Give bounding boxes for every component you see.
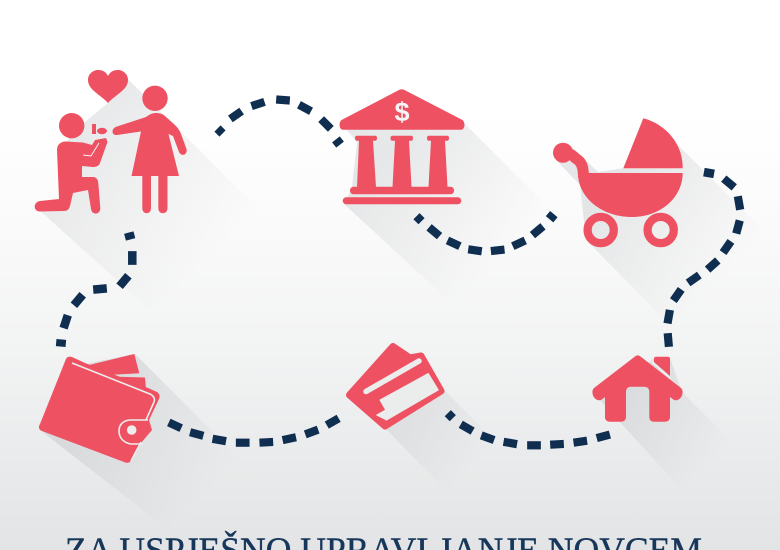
icon: wallet xyxy=(39,354,160,463)
icon: bank xyxy=(340,89,464,204)
roof gap xyxy=(651,361,671,379)
banknotes xyxy=(85,354,146,389)
figure: kneeling man xyxy=(35,113,108,214)
card window xyxy=(377,374,438,420)
chimney xyxy=(654,357,670,376)
dollar sign: $ xyxy=(394,97,410,127)
dashed path: cards to wallet xyxy=(168,415,340,446)
icon: proposal couple with heart xyxy=(35,70,187,214)
figure: woman xyxy=(112,86,187,213)
dashed path: bank to stroller xyxy=(414,212,557,255)
ring box xyxy=(92,124,96,134)
plinth xyxy=(350,187,454,194)
dashed path: wallet to couple xyxy=(56,232,136,347)
long shadow: house xyxy=(600,358,760,510)
icon: heart xyxy=(88,70,128,103)
long shadow: credit cards xyxy=(385,353,535,520)
house body xyxy=(592,355,683,422)
icon: house xyxy=(592,355,683,422)
stroller hood xyxy=(623,118,683,168)
icon: baby stroller xyxy=(553,118,683,243)
columns xyxy=(355,136,449,187)
wheels xyxy=(588,217,674,243)
dashed path: couple to bank xyxy=(215,96,343,147)
stroller handle xyxy=(563,153,584,178)
long shadow: wallet xyxy=(40,354,262,535)
icon: credit cards xyxy=(350,346,441,426)
wallet clasp xyxy=(119,420,148,444)
base xyxy=(343,197,461,204)
arm seam xyxy=(83,143,99,156)
long shadow: couple xyxy=(37,78,262,310)
wallet body xyxy=(39,357,160,463)
wallet seams xyxy=(72,363,154,461)
stroller body xyxy=(578,173,683,217)
card stripe xyxy=(366,361,419,392)
dashed path: stroller to house xyxy=(664,168,744,347)
dashed path: house to cards xyxy=(445,411,611,449)
card body xyxy=(350,346,441,426)
bank roof xyxy=(340,89,464,130)
long shadow: stroller xyxy=(556,135,780,335)
long shadow: bank xyxy=(344,123,575,320)
